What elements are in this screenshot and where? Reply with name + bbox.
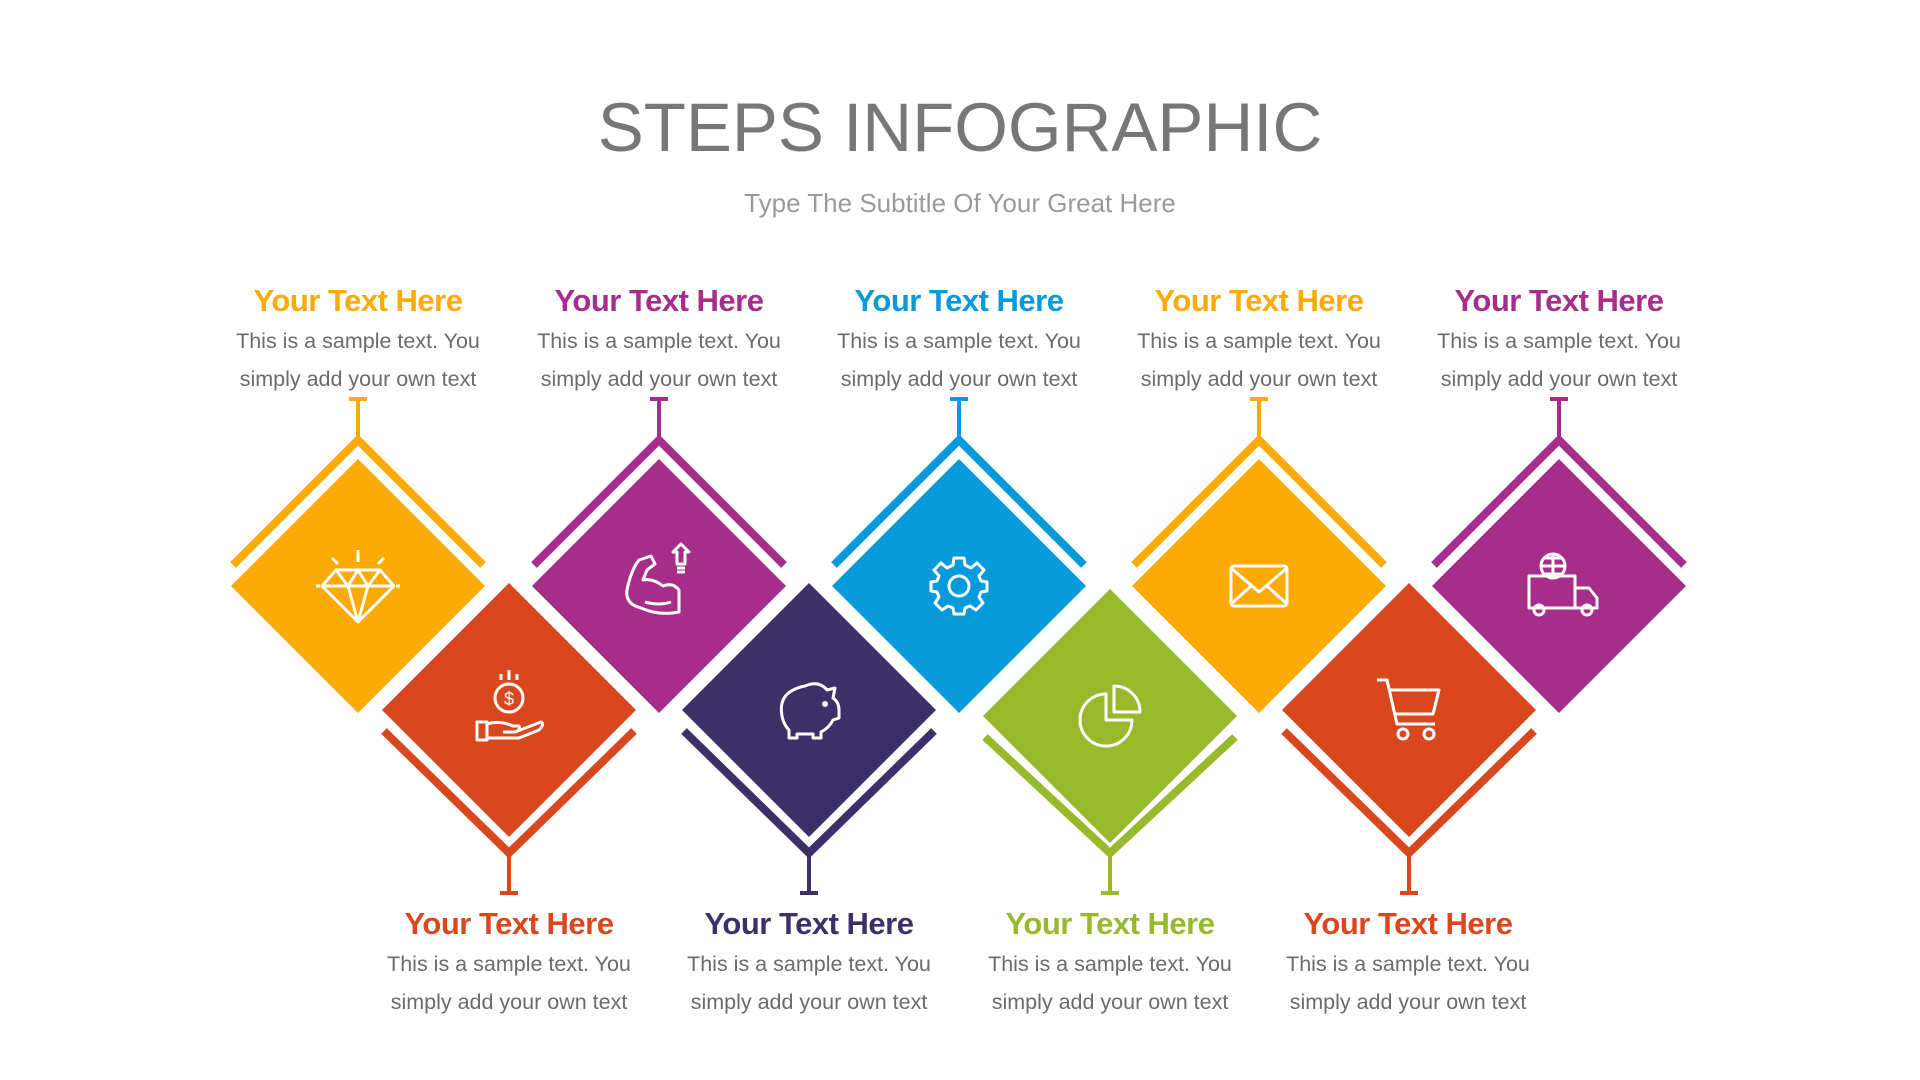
text: step 9: Your Text Here	[1455, 283, 1663, 318]
text: step 4: simply add your own text	[691, 990, 927, 1014]
text: step 7: This is a sample text. You	[1137, 329, 1381, 353]
icon: envelope	[1231, 566, 1287, 606]
text: step 3: simply add your own text	[541, 367, 777, 391]
icon: muscle arm	[627, 544, 689, 613]
icon: hand with coin	[477, 670, 543, 740]
text: step 6	[988, 906, 1232, 1014]
text: step 6: Your Text Here	[1006, 906, 1214, 941]
step 1 diamond	[231, 399, 485, 713]
step 9 diamond	[1432, 399, 1686, 713]
text: step 5: This is a sample text. You	[837, 329, 1081, 353]
text: step 6: simply add your own text	[992, 990, 1228, 1014]
icon: diamond	[316, 550, 400, 622]
text: step 1: Your Text Here	[254, 283, 462, 318]
text: step 2: Your Text Here	[405, 906, 613, 941]
text: step 7: simply add your own text	[1141, 367, 1377, 391]
text: step 1: simply add your own text	[240, 367, 476, 391]
text: step 4	[687, 906, 931, 1014]
text: step 3: This is a sample text. You	[537, 329, 781, 353]
subtitle: Type The Subtitle Of Your Great Here	[744, 188, 1176, 218]
text: step 9	[1437, 283, 1681, 391]
text: step 2: simply add your own text	[391, 990, 627, 1014]
text: step 3	[537, 283, 781, 391]
text: step 1	[236, 283, 480, 391]
step 2 diamond	[382, 583, 636, 893]
text: step 2	[387, 906, 631, 1014]
text: step 8: This is a sample text. You	[1286, 952, 1530, 976]
step 3 diamond	[532, 399, 786, 713]
step 4 diamond	[682, 583, 936, 893]
text: step 5: Your Text Here	[855, 283, 1063, 318]
text: step 7: Your Text Here	[1155, 283, 1363, 318]
text: step 5	[837, 283, 1081, 391]
text: step 5: simply add your own text	[841, 367, 1077, 391]
icon: pie chart	[1080, 686, 1140, 746]
text: step 6: This is a sample text. You	[988, 952, 1232, 976]
text: step 4: Your Text Here	[705, 906, 913, 941]
text: step 3: Your Text Here	[555, 283, 763, 318]
title: STEPS INFOGRAPHIC	[598, 89, 1322, 166]
step 7 diamond	[1132, 399, 1386, 713]
text: step 8: simply add your own text	[1290, 990, 1526, 1014]
icon: piggy bank	[781, 684, 839, 738]
text: step 1: This is a sample text. You	[236, 329, 480, 353]
icon: delivery truck	[1529, 554, 1597, 615]
text: step 8	[1286, 906, 1530, 1014]
text: step 2: This is a sample text. You	[387, 952, 631, 976]
step 5 diamond	[832, 399, 1086, 713]
icon: shopping cart	[1377, 680, 1439, 739]
text: step 8: Your Text Here	[1304, 906, 1512, 941]
text: step 7	[1137, 283, 1381, 391]
step 6 diamond	[983, 589, 1237, 893]
icon: gear	[931, 558, 987, 614]
text: step 9: simply add your own text	[1441, 367, 1677, 391]
icon: hand with coin: $	[504, 689, 514, 709]
text: step 4: This is a sample text. You	[687, 952, 931, 976]
text: step 9: This is a sample text. You	[1437, 329, 1681, 353]
step 8 diamond	[1282, 583, 1536, 893]
